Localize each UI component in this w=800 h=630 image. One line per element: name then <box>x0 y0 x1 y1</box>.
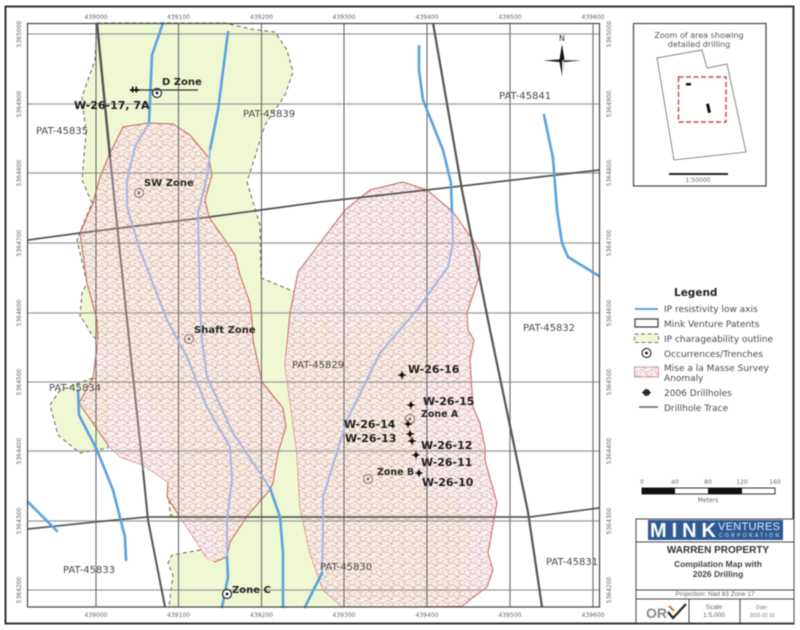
panel: title block <box>636 519 794 623</box>
coordinate grid <box>27 23 599 607</box>
scale: Scale <box>706 604 723 611</box>
northing tick labels: 5364900 <box>16 90 23 117</box>
northing tick labels: 5364200 <box>16 576 23 603</box>
map subtitle: Compilation Map with <box>674 559 762 569</box>
easting tick labels: 439300 <box>333 14 356 21</box>
patent labels <box>36 91 598 576</box>
northing tick labels: 5364500 <box>606 368 613 395</box>
icon: north arrow: N <box>559 34 565 43</box>
inset caption: Zoom of area showing <box>654 31 744 40</box>
drillhole labels: W-26-15 <box>423 395 474 408</box>
inset scale text: 1:50000 <box>686 177 711 184</box>
icon: north arrow <box>543 34 581 76</box>
northing tick labels: 5365000 <box>606 20 613 47</box>
date: Date: <box>756 605 768 611</box>
legend item: Drillhole Trace: Drillhole Trace <box>664 404 729 414</box>
patent labels: PAT-45834 <box>49 383 101 394</box>
zone labels: D Zone <box>162 77 202 88</box>
northing tick labels: 5364400 <box>16 437 23 464</box>
date: 2026 02 10 <box>749 613 775 619</box>
legend item: Mise a la Masse Survey Anomaly: Mise a la Masse Survey <box>664 364 770 374</box>
property outline <box>657 50 746 160</box>
patent labels: PAT-45832 <box>523 323 575 334</box>
northing tick labels: 5364500 <box>16 368 23 395</box>
easting tick labels: 439000 <box>85 612 108 619</box>
easting tick labels: 439000 <box>85 14 108 21</box>
northing tick labels: 5364400 <box>606 437 613 464</box>
easting tick labels <box>85 14 605 619</box>
easting tick labels: 439300 <box>333 612 356 619</box>
inset caption: detailed drilling <box>668 40 730 49</box>
patent labels: PAT-45830 <box>320 562 372 573</box>
drillhole labels: W-26-14 <box>344 418 396 431</box>
zone labels: Zone A <box>421 409 459 420</box>
scale bar: 40 <box>671 479 679 486</box>
scale bar: 80 <box>704 479 712 486</box>
drillhole labels: W-26-13 <box>345 432 396 445</box>
easting tick labels: 439100 <box>167 612 190 619</box>
Mise a la Masse anomaly: east body <box>285 182 497 607</box>
zone labels: SW Zone <box>144 178 194 189</box>
icon: Orix logo <box>646 604 686 621</box>
drillhole labels <box>74 99 474 489</box>
easting tick labels: 439400 <box>416 14 439 21</box>
scale bar <box>640 479 781 504</box>
scale bar: 0 <box>640 479 644 486</box>
Mink Ventures logo: MINK <box>650 520 717 542</box>
Mise a la Masse anomaly: west body <box>79 123 286 562</box>
occurrences and trenches <box>134 88 414 598</box>
map frame <box>28 24 600 607</box>
scale: 1:5,000 <box>703 612 725 619</box>
drillhole labels: W-26-17, 7A <box>74 99 150 112</box>
drillhole labels: W-26-11 <box>421 456 472 469</box>
scale bar: Meters <box>698 497 718 504</box>
IP chargeability outline area <box>50 23 343 607</box>
scale bar: 160 <box>769 479 781 486</box>
legend item: 2006 Drillholes: 2006 Drillholes <box>664 389 732 399</box>
Mink Ventures logo: VENTURES <box>718 521 780 533</box>
legend item: IP chargeability outline: IP charageability outline <box>664 335 773 345</box>
patent labels: PAT-45839 <box>243 109 295 120</box>
map title: WARREN PROPERTY <box>667 545 769 556</box>
northing tick labels: 5364200 <box>606 576 613 603</box>
drilling locations <box>686 83 711 113</box>
drillhole labels: W-26-10 <box>422 476 474 489</box>
icon: Orix logo: OR <box>646 605 667 621</box>
drillholes and traces <box>130 86 423 477</box>
northing tick labels: 5364300 <box>606 507 613 534</box>
drillhole labels: W-26-12 <box>421 439 472 452</box>
northing tick labels: 5365000 <box>16 20 23 47</box>
zone labels: Zone B <box>377 467 414 478</box>
detail extent <box>678 77 726 122</box>
legend item: Mise a la Masse Survey Anomaly <box>634 364 770 384</box>
legend heading: Legend <box>674 287 717 299</box>
northing tick labels: 5364300 <box>16 507 23 534</box>
northing tick labels: 5364600 <box>606 299 613 326</box>
patent labels: PAT-45833 <box>63 565 115 576</box>
easting tick labels: 439600 <box>582 612 605 619</box>
easting tick labels: 439500 <box>499 14 522 21</box>
patent boundaries <box>28 23 599 607</box>
patent labels: PAT-45841 <box>499 91 551 102</box>
northing tick labels: 5364600 <box>16 299 23 326</box>
northing tick labels: 5364700 <box>606 229 613 256</box>
northing tick labels: 5364700 <box>16 229 23 256</box>
patent labels: PAT-45831 <box>546 557 598 568</box>
IP resistivity low axes <box>28 23 599 607</box>
Mink Ventures logo: CORPORATION <box>719 533 779 539</box>
northing tick labels <box>16 20 613 603</box>
projection: Projection: Nad 83 Zone 17 <box>675 591 755 598</box>
panel: legend <box>634 287 773 414</box>
inset scale bar <box>669 173 728 175</box>
drillhole labels: W-26-16 <box>408 363 460 376</box>
easting tick labels: 439200 <box>250 612 273 619</box>
panel: map <box>16 14 613 619</box>
easting tick labels: 439200 <box>250 14 273 21</box>
zone labels <box>144 77 459 596</box>
legend item: Occurrences/Trenches: Occurrences/Trenches <box>664 350 763 360</box>
map subtitle: 2026 Drilling <box>693 569 743 579</box>
northing tick labels: 5364800 <box>16 159 23 186</box>
northing tick labels: 5364800 <box>606 159 613 186</box>
panel: location inset <box>634 24 766 186</box>
Mink Ventures logo <box>648 520 783 542</box>
patent labels: PAT-45829 <box>292 360 344 371</box>
easting tick labels: 439400 <box>416 612 439 619</box>
easting tick labels: 439600 <box>582 14 605 21</box>
legend item: Mise a la Masse Survey Anomaly: Anomaly <box>664 374 704 384</box>
legend item: IP resistivity low axis: IP resistivity low axis <box>664 305 758 315</box>
northing tick labels: 5364900 <box>606 90 613 117</box>
legend item: Mink Venture Patents: Mink Venture Patents <box>664 320 760 330</box>
scale bar: 120 <box>736 479 748 486</box>
zone labels: Shaft Zone <box>194 325 256 336</box>
zone labels: Zone C <box>232 585 271 596</box>
patent labels: PAT-45835 <box>36 126 88 137</box>
easting tick labels: 439100 <box>167 14 190 21</box>
easting tick labels: 439500 <box>499 612 522 619</box>
